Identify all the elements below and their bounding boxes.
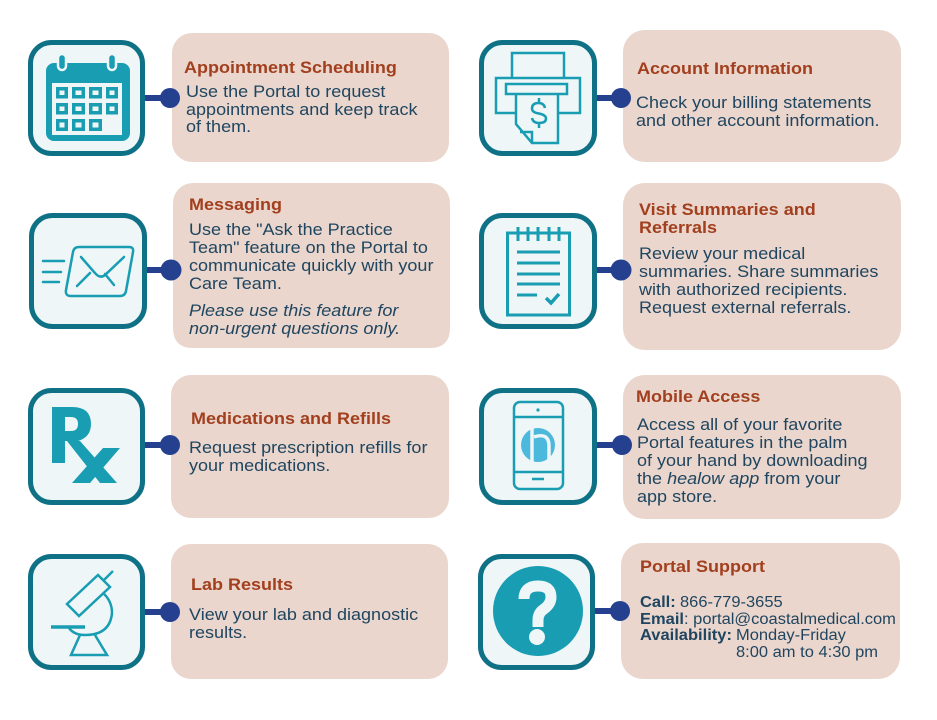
connector: portal support	[595, 601, 630, 621]
text: mobile access description: the healow app from your	[637, 468, 840, 488]
text: mobile access description: Portal features in the palm	[637, 432, 847, 452]
text: portal support contact details: : portal@coastalmedical.com	[684, 611, 896, 628]
text: messaging description: Team" feature on the Portal to	[189, 237, 428, 257]
text: portal support contact details: 866-779-3655	[680, 594, 783, 611]
text: account information description: Check your billing statements	[636, 92, 872, 112]
panel: mobile access	[482, 375, 901, 519]
connector: lab results	[145, 602, 180, 622]
heading: visit summaries and referrals: Visit Summaries and	[639, 199, 816, 219]
connector: appointment scheduling	[145, 88, 180, 108]
text: portal support contact details: Call:	[640, 594, 676, 611]
text: appointment scheduling description: appointments and keep track	[186, 99, 418, 119]
connector: mobile access	[597, 435, 632, 455]
text: portal support contact details: 8:00 am to 4:30 pm	[736, 644, 878, 661]
text: visit summaries description: summaries. Share summaries	[639, 261, 879, 281]
heading: visit summaries and referrals: Referrals	[639, 217, 717, 237]
heading: mobile access: Mobile Access	[636, 386, 761, 406]
text: mobile access description: Access all of your favorite	[637, 414, 842, 434]
icon: microscope	[30, 556, 142, 668]
icon: smartphone	[482, 390, 594, 502]
text: messaging description: communicate quickly with your	[189, 255, 434, 275]
connector: messaging	[147, 260, 182, 280]
text: lab results description: View your lab and diagnostic	[189, 604, 418, 624]
icon: calendar	[30, 42, 142, 154]
text: mobile access description: of your hand by downloading	[637, 450, 868, 470]
text: medications description: your medications.	[189, 455, 330, 475]
text: account information description: and other account information.	[636, 110, 880, 130]
panel: appointment scheduling	[30, 33, 449, 162]
panel: messaging	[32, 183, 450, 348]
heading: portal support: Portal Support	[640, 556, 765, 576]
heading: account information: Account Information	[637, 58, 813, 78]
icon: printer with bill	[482, 42, 594, 154]
text: messaging note: Please use this feature for	[189, 300, 400, 320]
text: messaging description: Use the "Ask the Practice	[189, 219, 393, 239]
text: mobile access description: app store.	[637, 486, 717, 506]
text: appointment scheduling description: Use the Portal to request	[186, 81, 386, 101]
text: appointment scheduling description: of them.	[186, 116, 251, 136]
panel: lab results	[30, 544, 448, 679]
icon: envelope	[32, 216, 144, 326]
panel: account information	[482, 30, 901, 162]
connector: account information	[597, 88, 631, 108]
panel: medications and refills	[30, 375, 449, 518]
text: visit summaries description: with authorized recipients.	[638, 279, 847, 299]
text: portal support contact details: Availability:	[640, 627, 732, 644]
connector: medications	[145, 435, 180, 455]
icon: dollar sign	[532, 98, 546, 128]
connector: visit summaries	[597, 260, 632, 280]
text: messaging note: non-urgent questions only.	[189, 318, 400, 338]
text: medications description: Request prescription refills for	[189, 437, 428, 457]
heading: messaging: Messaging	[189, 194, 282, 214]
text: visit summaries description: Review your medical	[639, 243, 805, 263]
panel: visit summaries and referrals	[482, 183, 901, 350]
icon: question mark	[480, 556, 592, 668]
text: messaging description: Care Team.	[189, 273, 282, 293]
text: lab results description: results.	[189, 622, 247, 642]
text: visit summaries description: Request external referrals.	[639, 297, 851, 317]
heading: appointment scheduling: Appointment Scheduling	[184, 57, 397, 77]
icon: Rx	[30, 390, 142, 502]
heading: medications and refills: Medications and Refills	[191, 408, 391, 428]
icon: notepad	[482, 216, 594, 326]
text: portal support contact details: Monday-Friday	[736, 627, 846, 644]
heading: lab results: Lab Results	[191, 574, 293, 594]
panel: portal support	[480, 543, 900, 679]
text: portal support contact details: Email	[640, 611, 684, 628]
